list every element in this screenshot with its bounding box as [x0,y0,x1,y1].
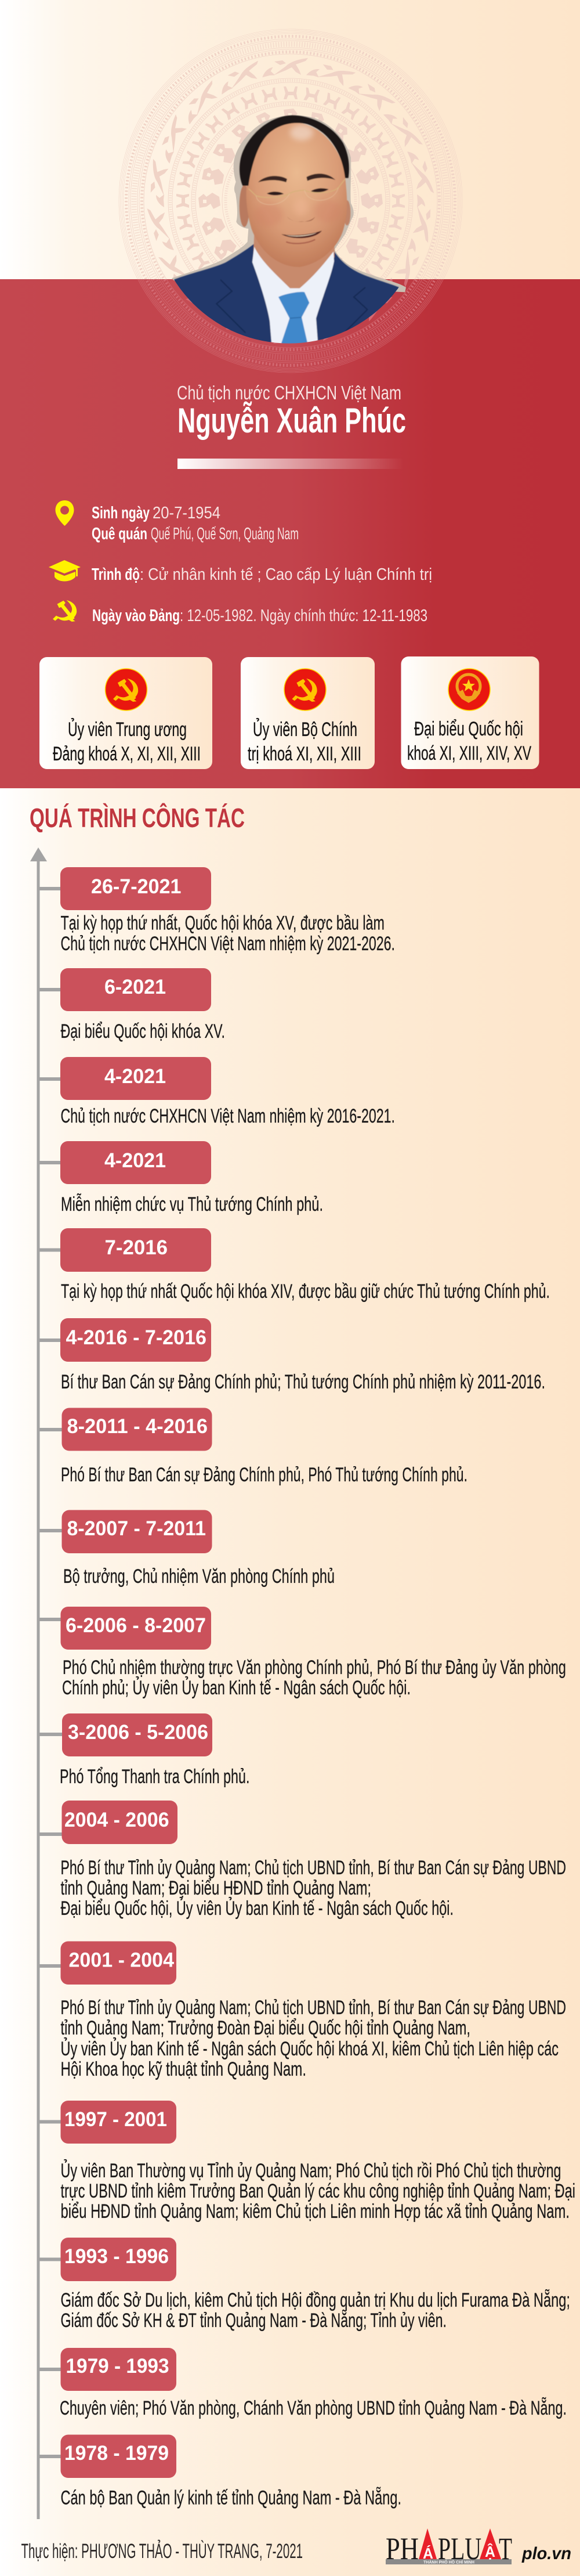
section heading: QUÁ TRÌNH CÔNG TÁC [30,803,245,833]
timeline entry: 4-2016 - 7-2016 [38,1318,545,1393]
portrait figure [174,116,405,362]
portrait illustration [172,116,406,362]
timeline arrow [30,847,47,2519]
card text: Ủy viên Trung ương [68,719,187,741]
logo: Pháp Luật: PLU [438,2531,481,2566]
position: Chủ tịch nước CHXHCN Việt Nam [177,382,401,403]
bronze drum ornament on cream [118,29,463,279]
icon: party emblem [284,669,326,710]
logo: Pháp Luật: T [499,2531,512,2566]
hometown: Quê quán [92,525,147,543]
timeline entry: 1979 - 1993: 1979 - 1993 [66,2355,169,2377]
card: Central Committee [39,657,212,769]
logo: Pháp Luật: Á [423,2545,433,2562]
timeline entry: 26-7-2021: Chủ tịch nước CHXHCN Việt Nam nhiệm kỳ 2021-2026. [60,933,395,955]
suit [174,244,399,342]
timeline entry: 2001 - 2004: Hội Khoa học kỹ thuật tỉnh Quảng Nam. [60,2058,306,2080]
timeline entry: 7-2016: 7-2016 [104,1236,168,1259]
timeline entry: 7-2016 [38,1228,550,1303]
card text [53,719,201,765]
birth date: 20-7-1954 [153,504,220,522]
timeline entry: 6-2006 - 8-2007: Chính phủ; Ủy viên Ủy ban Kinh tế - Ngân sách Quốc hội. [62,1677,411,1699]
timeline entry: 6-2006 - 8-2007 [38,1607,566,1699]
timeline entry: 1978 - 1979: 1978 - 1979 [64,2442,169,2465]
card text: Ủy viên Bộ Chính [253,719,357,741]
icon: location pin [56,500,74,526]
eyes [267,192,284,195]
forehead highlight [290,125,313,140]
timeline entry: 4-2021 dismissal [38,1141,323,1215]
timeline entry: 4-2021 dismissal: 4-2021 [104,1149,166,1172]
timeline entry: 1979 - 1993 [38,2348,567,2419]
hometown: Quế Phú, Quế Sơn, Quảng Nam [151,525,299,543]
timeline entry: 1997 - 2001 [38,2101,575,2223]
birth date [92,504,220,522]
card text [407,718,531,764]
icon: graduation cap [49,560,81,582]
icon: national emblem [448,669,490,710]
glasses [248,179,345,197]
timeline entry: 4-2021 president: 4-2021 [104,1065,166,1088]
timeline entry: 3-2006 - 5-2006: Phó Tổng Thanh tra Chính phủ. [60,1766,249,1788]
mouth [281,230,322,238]
timeline entry: 8-2011 - 4-2016 [38,1408,467,1486]
timeline entry: 1993 - 1996: 1993 - 1996 [64,2245,169,2268]
timeline entry: 4-2016 - 7-2016: 4-2016 - 7-2016 [66,1326,206,1349]
card text [248,719,361,765]
timeline entry: 6-2021 [38,968,225,1042]
face [246,122,347,267]
card text: Đại biểu Quốc hội [414,718,523,740]
timeline entry: 1997 - 2001: 1997 - 2001 [64,2108,167,2131]
icon: party emblem [106,669,147,710]
logo: Pháp Luật: PH [386,2531,419,2566]
suit lapels [216,280,367,335]
card text: trị khoá XI, XII, XIII [248,743,361,765]
shirt [252,247,334,344]
hometown [92,525,299,543]
timeline entry: 3-2006 - 5-2006 [38,1713,249,1788]
timeline entry: 1978 - 1979 [38,2434,401,2509]
ears [240,185,249,227]
timeline entry: 2004 - 2006 [38,1801,566,1920]
logo: Pháp Luật: THÀNH PHỐ HỒ CHÍ MINH [423,2559,474,2564]
portrait halo [172,116,406,292]
timeline entry: 26-7-2021 [38,867,395,955]
nose [287,217,315,222]
neck [253,234,335,289]
party admission: : 12-05-1982. Ngày chính thức: 12-11-1983 [180,607,427,625]
timeline entry: 2001 - 2004 [38,1941,566,2080]
red profile panel background [0,279,580,788]
logo: Pháp Luật [386,2528,512,2566]
timeline entry: 8-2007 - 7-2011: 8-2007 - 7-2011 [67,1517,206,1540]
timeline entry: 1978 - 1979: Cán bộ Ban Quản lý kinh tế tỉnh Quảng Nam - Đà Nẵng. [60,2487,401,2509]
party admission: Ngày vào Đảng [92,607,180,625]
website label: plo.vn [521,2544,571,2563]
card text: Đảng khoá X, XI, XII, XIII [53,743,201,765]
eyebrows [258,176,287,182]
gradient rule [177,459,404,469]
timeline entry: 2001 - 2004: 2001 - 2004 [68,1949,175,1971]
timeline entry: 1993 - 1996 [38,2238,570,2332]
timeline entry: 6-2006 - 8-2007: 6-2006 - 8-2007 [66,1614,206,1637]
tie [278,292,309,344]
hair [240,116,349,186]
birth date: Sinh ngày [92,504,150,522]
credit line: Thực hiện: PHƯƠNG THẢO - THÙY TRANG, 7-2021 [21,2539,303,2563]
card: National Assembly [401,656,539,769]
party admission [92,607,427,625]
timeline entry: 8-2007 - 7-2011 [38,1510,335,1588]
timeline entry: 2004 - 2006: tỉnh Quảng Nam; Đại biểu HĐND tỉnh Quảng Nam; [60,1877,371,1899]
timeline entry: 6-2021: 6-2021 [104,976,166,998]
timeline entry: 4-2021 president: Chủ tịch nước CHXHCN Việt Nam nhiệm kỳ 2016-2021. [60,1105,395,1127]
name: Nguyễn Xuân Phúc [177,401,406,440]
logo: Pháp Luật: Ậ [485,2543,495,2560]
education: Trình độ [92,565,140,584]
card: Politburo [241,657,375,769]
bronze drum ornament on red [137,279,444,373]
timeline entry: 3-2006 - 5-2006: 3-2006 - 5-2006 [68,1721,208,1744]
timeline entry: 2004 - 2006: 2004 - 2006 [64,1809,169,1831]
timeline entry: 26-7-2021: 26-7-2021 [91,875,181,898]
timeline entry: 26-7-2021: Tại kỳ họp thứ nhất, Quốc hội khóa XV, được bầu làm [60,912,385,935]
timeline entry: 4-2021 president [38,1057,395,1127]
icon: hammer and sickle [53,600,77,622]
timeline entry: 8-2011 - 4-2016: 8-2011 - 4-2016 [67,1415,208,1438]
personal info [49,500,432,625]
timeline entry: 6-2021: Đại biểu Quốc hội khóa XV. [60,1020,225,1042]
cheeks [259,205,282,223]
title block [177,382,406,469]
timeline entry: 4-2021 dismissal: Miễn nhiệm chức vụ Thủ tướng Chính phủ. [61,1193,323,1215]
education: : Cử nhân kinh tế ; Cao cấp Lý luận Chính trị [140,565,432,584]
timeline entry: 8-2007 - 7-2011: Bộ trưởng, Chủ nhiệm Văn phòng Chính phủ [63,1565,335,1588]
